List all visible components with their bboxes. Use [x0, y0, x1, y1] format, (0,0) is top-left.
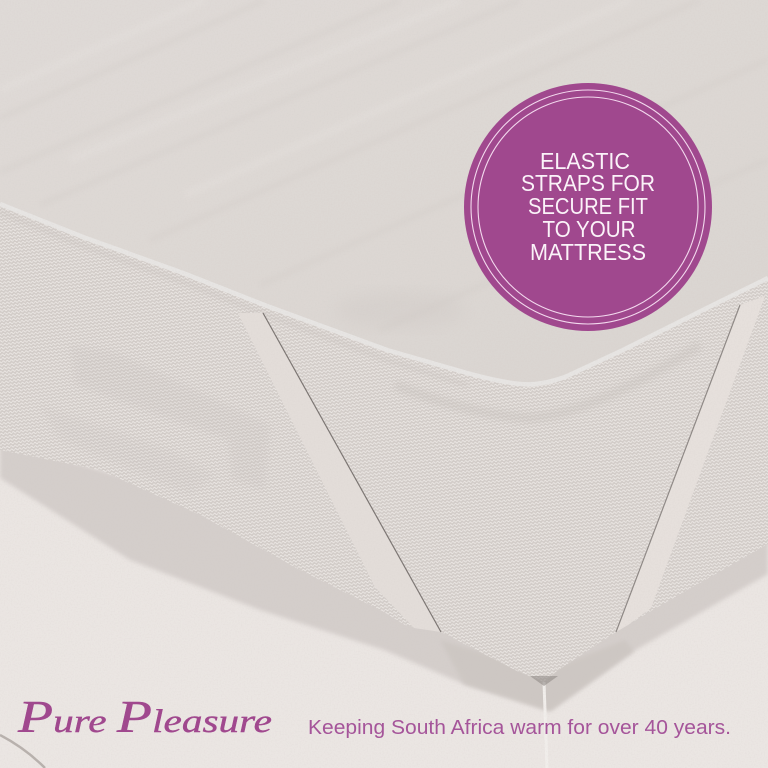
mattress corner tip	[530, 676, 558, 686]
pocket handle	[40, 345, 270, 495]
badge circle	[464, 83, 712, 331]
badge text: MATTRESS	[530, 239, 646, 265]
badge text: STRAPS FOR	[521, 170, 655, 196]
lower left corner curve	[0, 735, 45, 768]
badge text	[521, 148, 655, 265]
tagline: Keeping South Africa warm for over 40 years.	[308, 717, 731, 739]
badge inner ring	[478, 97, 698, 317]
brand logo: Pure Pleasure	[17, 691, 272, 742]
mattress side panels	[0, 204, 768, 682]
right elastic strap	[616, 296, 765, 632]
base corner seam	[544, 682, 547, 768]
badge text: ELASTIC	[540, 148, 630, 174]
badge: elastic straps	[464, 83, 712, 331]
badge text: TO YOUR	[542, 216, 636, 242]
mattress piping edge	[0, 204, 768, 384]
badge outer ring	[471, 90, 705, 324]
left elastic strap	[238, 313, 441, 632]
mattress top surface	[0, 0, 768, 384]
badge text: SECURE FIT	[528, 193, 648, 219]
shadow band under mattress	[0, 440, 768, 711]
